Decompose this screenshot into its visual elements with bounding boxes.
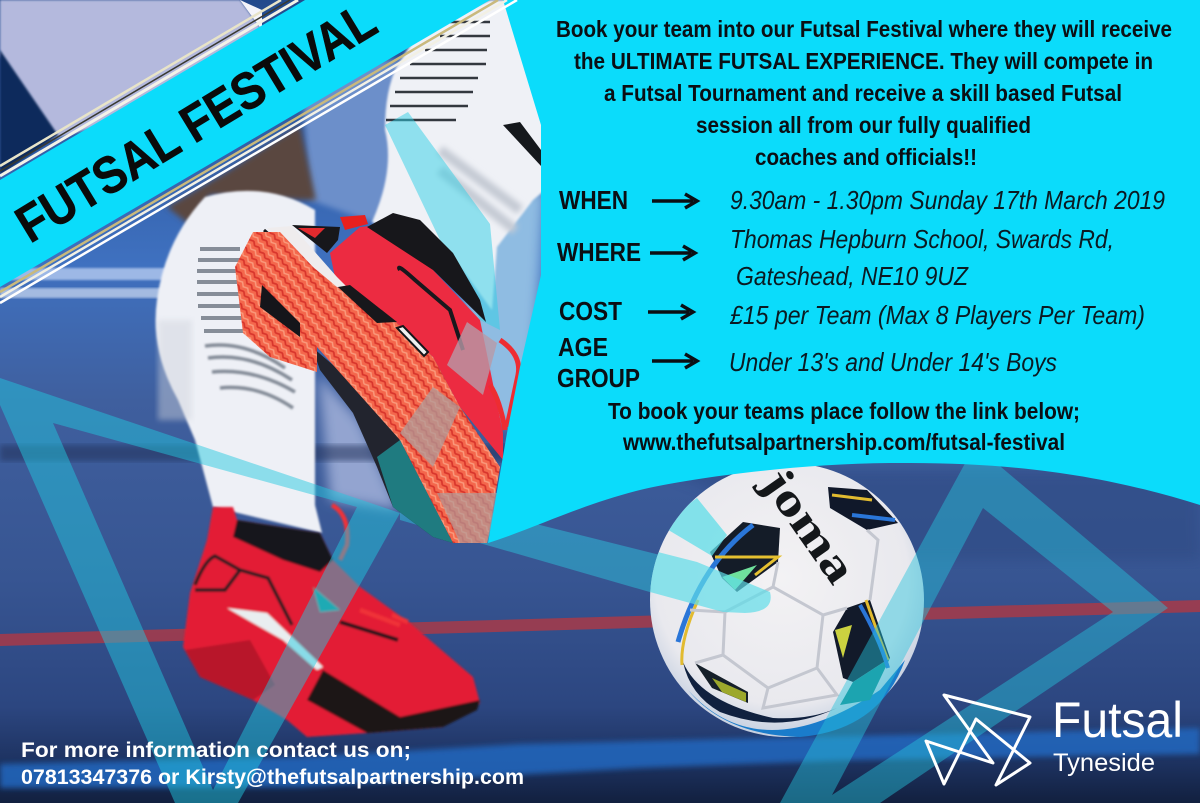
row: age group: AGE <box>558 332 608 362</box>
logo: Futsal Tyneside: Tyneside <box>1053 749 1155 777</box>
logo: Futsal Tyneside: Futsal <box>1052 692 1183 748</box>
contact text: 07813347376 or Kirsty@thefutsalpartnership.com <box>21 766 524 789</box>
row: where <box>557 224 1114 291</box>
row: age group <box>557 332 1057 393</box>
shoe outsole <box>235 232 500 543</box>
shoe sole teal part <box>377 440 453 543</box>
midsole black piece <box>338 285 397 323</box>
row: cost: £15 per Team (Max 8 Players Per Team) <box>729 300 1145 330</box>
ball seams <box>690 530 878 708</box>
lower red shoe <box>183 505 480 737</box>
arrow <box>652 194 697 208</box>
ball crescent <box>688 660 905 737</box>
court red line <box>0 600 1200 646</box>
court blue band <box>0 728 1200 788</box>
ball brand text: joma <box>751 457 867 593</box>
intro text block: the ULTIMATE FUTSAL EXPERIENCE. They will compete in <box>574 48 1153 74</box>
sole logo patch <box>260 285 300 337</box>
cyan info panel <box>488 0 1200 543</box>
arrow <box>652 354 697 368</box>
banner <box>0 0 490 287</box>
shoe upper <box>330 225 503 460</box>
logo: Futsal Tyneside <box>926 692 1183 785</box>
shoe black collar <box>367 213 486 322</box>
row: cost <box>559 296 1145 330</box>
translucent triangle right <box>780 445 1168 803</box>
contact text <box>21 739 524 789</box>
right leg sock <box>372 0 545 310</box>
translucent bands on ball <box>650 498 771 613</box>
intro text block <box>556 16 1172 170</box>
shoe midsole white <box>267 226 347 287</box>
booking text: To book your teams place follow the link below; <box>608 398 1080 424</box>
translucent triangle left <box>0 378 400 803</box>
intro text block: coaches and officials!! <box>755 144 977 170</box>
ball dark graphic panels <box>710 522 780 592</box>
left leg sock <box>156 191 322 533</box>
upper red shoe <box>235 213 519 543</box>
banner stripes <box>0 0 517 303</box>
intro text block: session all from our fully qualified <box>696 112 1031 138</box>
shoe heel tab <box>340 215 368 230</box>
row: when <box>559 185 1165 215</box>
row: age group: Under 13's and Under 14's Boys <box>729 347 1057 377</box>
arrow <box>648 305 693 319</box>
translucent band on sock <box>385 112 500 330</box>
shoelaces <box>490 340 519 430</box>
booking text <box>608 398 1080 455</box>
row: when: WHEN <box>559 185 628 215</box>
second shoe laces <box>332 505 408 625</box>
row: cost: COST <box>559 296 622 326</box>
arrow <box>650 246 695 260</box>
row: where: Thomas Hepburn School, Swards Rd, <box>730 224 1114 254</box>
intro text block: a Futsal Tournament and receive a skill based Futsal <box>604 80 1122 106</box>
shoe swoosh <box>399 268 463 350</box>
contact text: For more information contact us on; <box>21 739 411 762</box>
booking text: www.thefutsalpartnership.com/futsal-festival <box>622 429 1065 455</box>
shoe grey tint <box>400 387 460 467</box>
shoe toe lavender tint <box>447 322 497 395</box>
row: where: Gateshead, NE10 9UZ <box>736 261 969 291</box>
ball coloured arcs <box>678 525 753 642</box>
row: age group: GROUP <box>557 363 640 393</box>
shoe sole dark band <box>312 347 453 543</box>
row: where: WHERE <box>557 237 641 267</box>
logo mark <box>926 695 1030 785</box>
player shorts and thigh <box>0 0 316 225</box>
translucent band to ball <box>400 490 660 595</box>
ball <box>650 457 924 737</box>
